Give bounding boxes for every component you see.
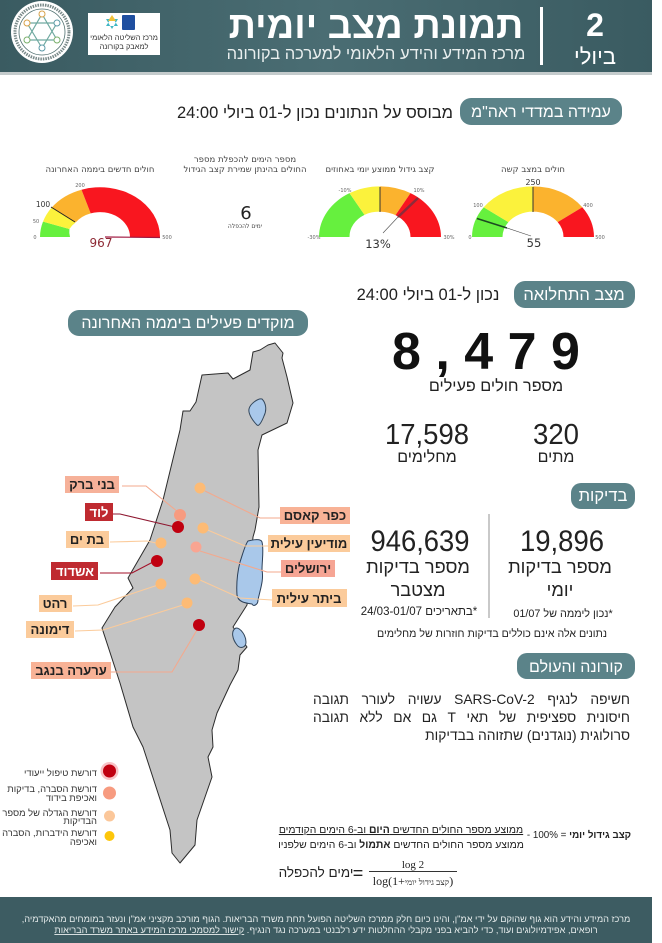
city labels: בני ברק xyxy=(69,477,115,492)
corona and the world paragraph xyxy=(313,692,630,743)
icon: national control centre logo: מרכז השליטה הלאומי xyxy=(90,33,158,42)
footer: רופאים, אפידמיולוגים ועוד, כדי להביא בפני מקבלי ההחלטות ידע רלבנטי במערכה נגד הנגיף. קישור למסמכי מרכז המידע באתר משרד הבריאות xyxy=(54,925,598,935)
gauge: severe patients: חולים במצב קשה xyxy=(501,165,565,175)
gauge: average daily growth rate: קצב גידול ממוצע יומי באחוזים xyxy=(325,165,435,175)
section heading: corona and the world xyxy=(517,653,635,679)
cumulative tests: *בתאריכים 24/03-01/07 xyxy=(361,606,478,618)
gauge: average daily growth rate: 13% xyxy=(365,237,391,251)
growth rate formula: קצב גידול יומי = 100% - xyxy=(527,830,631,841)
gauge: new patients in last 24 hours: 0 xyxy=(33,235,37,241)
date xyxy=(574,7,616,69)
header band xyxy=(0,0,652,75)
doubling time indicator: ימים להכפלה xyxy=(228,223,262,230)
gauge: new patients in last 24 hours: 100 xyxy=(36,200,50,209)
gauge: severe patients: 0 xyxy=(468,235,472,241)
icon: national control centre logo xyxy=(88,13,160,55)
city labels: בת ים xyxy=(70,532,104,547)
gauge: severe patients: 500 xyxy=(595,235,605,241)
doubling time indicator: מספר הימים להכפלת מספר xyxy=(194,155,296,165)
city labels: רהט xyxy=(43,596,67,611)
growth rate formula: ממוצע מספר החולים החדשים אתמול וב-6 הימים שלפניו xyxy=(278,839,524,851)
lake: Dead Sea xyxy=(237,540,263,605)
lake: southern reservoir xyxy=(233,628,246,647)
section heading: indicators xyxy=(460,98,622,125)
leader lines xyxy=(73,486,281,672)
gauge: new patients in last 24 hours: 200 xyxy=(75,183,85,189)
doubling time formula: ימים להכפלה xyxy=(279,865,353,880)
doubling time indicator: החולים בהינתן שמירת קצב הגידול xyxy=(183,165,307,175)
deaths: 320 xyxy=(533,419,579,451)
growth rate formula xyxy=(278,824,631,851)
city labels: לוד xyxy=(90,505,108,520)
daily tests: 19,896 xyxy=(520,525,604,558)
city labels xyxy=(26,476,350,679)
active patients label: מספר חולים פעילים xyxy=(429,377,563,395)
gauge: new patients in last 24 hours: 50 xyxy=(33,219,39,225)
daily tests: *נכון ליממה של 01/07 xyxy=(513,608,613,620)
doubling time formula: log(1+קצב גידול יומי) xyxy=(373,874,453,888)
section heading: morbidity status: מצב התחלואה xyxy=(523,286,625,304)
gauge: new patients in last 24 hours: 500 xyxy=(162,235,172,241)
city labels: דימונה xyxy=(31,622,70,637)
tests divider xyxy=(488,514,490,618)
gauge: severe patients: 100 xyxy=(473,203,483,209)
city labels: ערערה בנגב xyxy=(35,663,107,678)
data timestamp: מבוסס על הנתונים נכון ל-01 ביולי 24:00 xyxy=(177,104,453,122)
cumulative tests: מספר בדיקות xyxy=(366,557,470,577)
map of Israel with hotspots xyxy=(26,343,350,863)
city labels: ירושלים xyxy=(285,561,331,576)
header divider xyxy=(540,7,543,65)
cumulative tests: מצטבר xyxy=(391,580,445,600)
doubling time formula: log 2 xyxy=(402,859,424,871)
doubling time indicator: 6 xyxy=(240,203,252,224)
icon: national control centre logo: למאבק בקורונה xyxy=(100,42,148,51)
doubling time formula: = xyxy=(353,863,363,883)
active patients big number: 8 , 4 7 9 xyxy=(392,323,580,381)
doubling time indicator xyxy=(183,155,307,230)
map legend: דורשת הסברה, בדיקות xyxy=(7,783,97,794)
daily tests xyxy=(508,525,613,620)
gauge: severe patients: 55 xyxy=(527,236,541,250)
gauge: average daily growth rate: -10% xyxy=(339,188,352,194)
corona and the world paragraph: חשיפה לנגיף SARS-CoV-2 עשויה לעורר תגובה xyxy=(313,692,630,707)
section heading: tests xyxy=(571,483,635,509)
date: ביולי xyxy=(574,44,616,69)
doubling time formula xyxy=(279,859,457,888)
section heading: corona and the world: קורונה והעולם xyxy=(529,658,623,676)
title: תמונת מצב יומית xyxy=(229,5,523,47)
map legend: ואכיפה xyxy=(70,836,97,847)
gauge: average daily growth rate: 30% xyxy=(443,235,455,241)
section heading: indicators: עמידה במדדי ראה"מ xyxy=(471,104,611,121)
morbidity timestamp: נכון ל-01 ביולי 24:00 xyxy=(357,286,499,304)
gauge: new patients in last 24 hours: חולים חדשים ביממה האחרונה xyxy=(46,165,154,175)
city labels: אשדוד xyxy=(56,564,94,579)
city labels: ביתר עילית xyxy=(277,591,341,606)
gauge: severe patients: 250 xyxy=(525,178,541,187)
cumulative tests xyxy=(361,525,478,618)
cumulative tests: 946,639 xyxy=(370,525,470,558)
map legend: ואכיפת בידוד xyxy=(46,792,97,803)
daily tests: יומי xyxy=(547,580,573,600)
hotspot dots xyxy=(151,482,208,631)
date: 2 xyxy=(586,7,604,43)
section heading: morbidity status xyxy=(514,281,635,308)
section heading: tests: בדיקות xyxy=(579,487,627,505)
daily tests: מספר בדיקות xyxy=(508,557,612,577)
corona and the world paragraph: סרולוגית (נוגדנים) שתזוהה בבדיקות xyxy=(425,728,630,743)
map legend: דורשת טיפול ייעודי xyxy=(24,767,97,778)
footer: מרכז המידע והידע הוא גוף שהוקם על ידי אמ"ן, והינו כיום חלק ממרכז השליטה הפועל תחת משרד הבריאות. הגוף מורכב מקציני אמ"ן ונעזר במומחים מהאקדמיה, xyxy=(22,914,630,924)
subtitle: מרכז המידע והידע הלאומי למערכה בקורונה xyxy=(227,45,525,63)
section heading: active hotspots: מוקדים פעילים ביממה האחרונה xyxy=(81,314,295,332)
recovered xyxy=(385,419,469,466)
city labels: כפר קאסם xyxy=(284,508,346,523)
icon: knowledge center round logo xyxy=(11,1,73,63)
growth rate formula: ממוצע מספר החולים החדשים היום וב-6 הימים הקודמים xyxy=(279,824,523,836)
map legend: הבדיקות xyxy=(63,815,97,826)
gauge: average daily growth rate xyxy=(308,165,455,251)
gauge: average daily growth rate: -30% xyxy=(308,235,321,241)
city labels: מודיעין עילית xyxy=(271,536,347,551)
lake: Kinneret xyxy=(249,399,266,425)
corona and the world paragraph: חיסונית ספציפית של תאי T גם אם ללא תגובה xyxy=(313,710,630,725)
map legend xyxy=(2,762,118,847)
map legend: דורשת הידברות, הסברה xyxy=(2,827,97,838)
recovered: מחלימים xyxy=(397,448,457,466)
gauge: new patients in last 24 hours: 967 xyxy=(90,236,112,250)
map legend: דורשת הגדלה של מספר xyxy=(2,807,97,818)
recovered: 17,598 xyxy=(385,419,469,451)
gauge: severe patients xyxy=(468,165,605,250)
gauge: average daily growth rate: 10% xyxy=(413,188,425,194)
footer xyxy=(0,897,652,943)
deaths: מתים xyxy=(538,449,574,466)
deaths xyxy=(533,419,579,466)
section heading: active hotspots xyxy=(68,310,308,336)
tests footnote: נתונים אלה אינם כוללים בדיקות חוזרות של מחלימים xyxy=(377,628,607,640)
gauge: new patients in last 24 hours xyxy=(33,165,172,250)
gauge: severe patients: 400 xyxy=(583,203,593,209)
